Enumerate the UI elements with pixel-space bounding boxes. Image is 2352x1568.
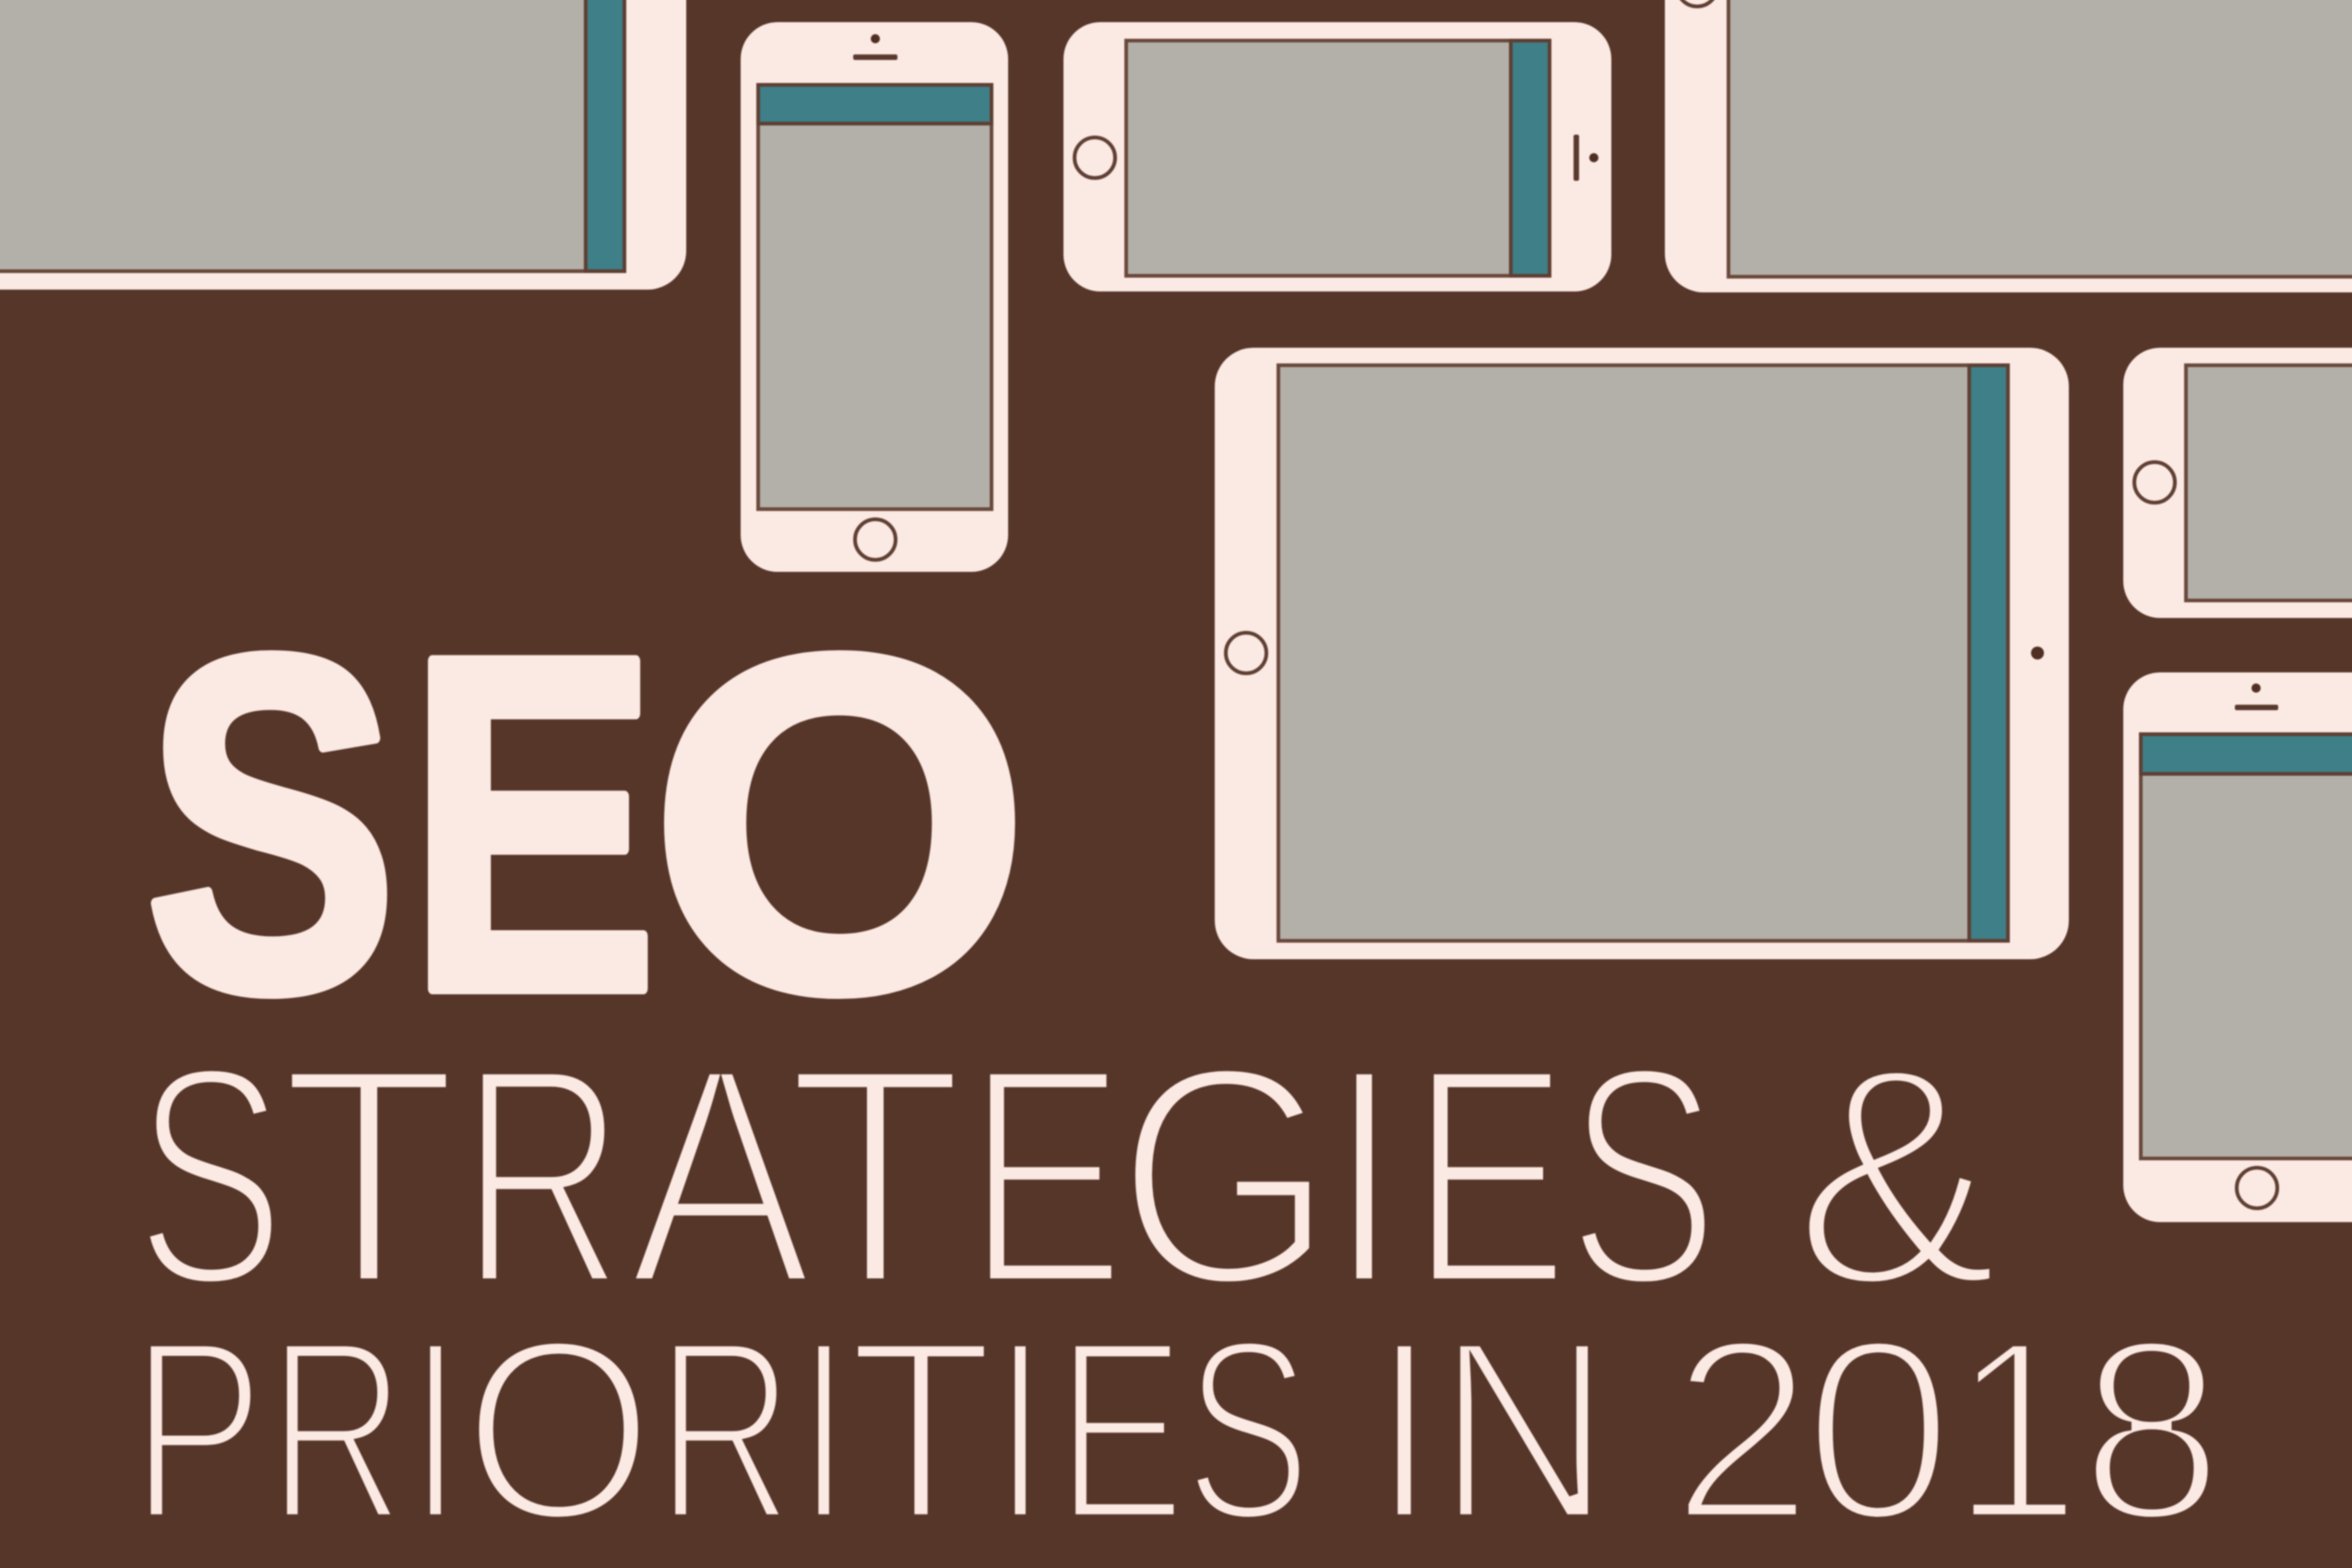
title: priorities in 2018: I <box>993 1287 1047 1568</box>
title: priorities in 2018: P <box>131 1287 265 1568</box>
title: priorities in 2018: 8 <box>2080 1287 2224 1568</box>
title: strategies and: E <box>967 1001 1125 1350</box>
title: priorities in 2018: 1 <box>1952 1287 2081 1568</box>
title: SEO: O <box>649 557 1030 1090</box>
title: strategies and: T <box>280 1001 457 1350</box>
title: SEO: S <box>144 557 398 1090</box>
phone: portrait, top centre <box>741 22 1008 572</box>
phone: landscape, top centre <box>1063 22 1611 291</box>
title: strategies and: A <box>628 1001 814 1350</box>
tablet: top-right, cropped <box>1665 0 2352 292</box>
title: priorities in 2018: R <box>656 1287 794 1568</box>
title: strategies and: I <box>1326 1001 1402 1350</box>
title: priorities in 2018: O <box>463 1287 654 1568</box>
tablet: top-left, cropped <box>0 0 686 290</box>
title: priorities in 2018: I <box>409 1287 462 1568</box>
phone: landscape, right edge, cropped <box>2123 348 2352 618</box>
title: priorities in 2018: I <box>1372 1287 1437 1568</box>
title <box>131 557 2224 1568</box>
title: strategies and: S <box>135 1001 286 1350</box>
tablet: large, centre <box>1215 348 2069 959</box>
title: priorities in 2018: E <box>1056 1287 1185 1568</box>
title: strategies and: T <box>787 1001 964 1350</box>
title: strategies and: S <box>1567 1001 1719 1350</box>
title: strategies and: G <box>1116 1001 1336 1350</box>
title: priorities in 2018: I <box>797 1287 850 1568</box>
title: priorities in 2018: N <box>1435 1287 1612 1568</box>
title: strategies and: E <box>1410 1001 1570 1350</box>
title: SEO: E <box>407 557 659 1090</box>
title: priorities in 2018: T <box>849 1287 993 1568</box>
title: priorities in 2018: S <box>1184 1287 1312 1568</box>
phone: portrait, right edge, cropped <box>2123 672 2352 1222</box>
title: priorities in 2018: 0 <box>1803 1287 1954 1568</box>
title: priorities in 2018: R <box>267 1287 406 1568</box>
title: strategies and: & <box>1793 1001 2000 1350</box>
title: priorities in 2018: 2 <box>1671 1287 1813 1568</box>
title: strategies and: R <box>460 1001 625 1350</box>
